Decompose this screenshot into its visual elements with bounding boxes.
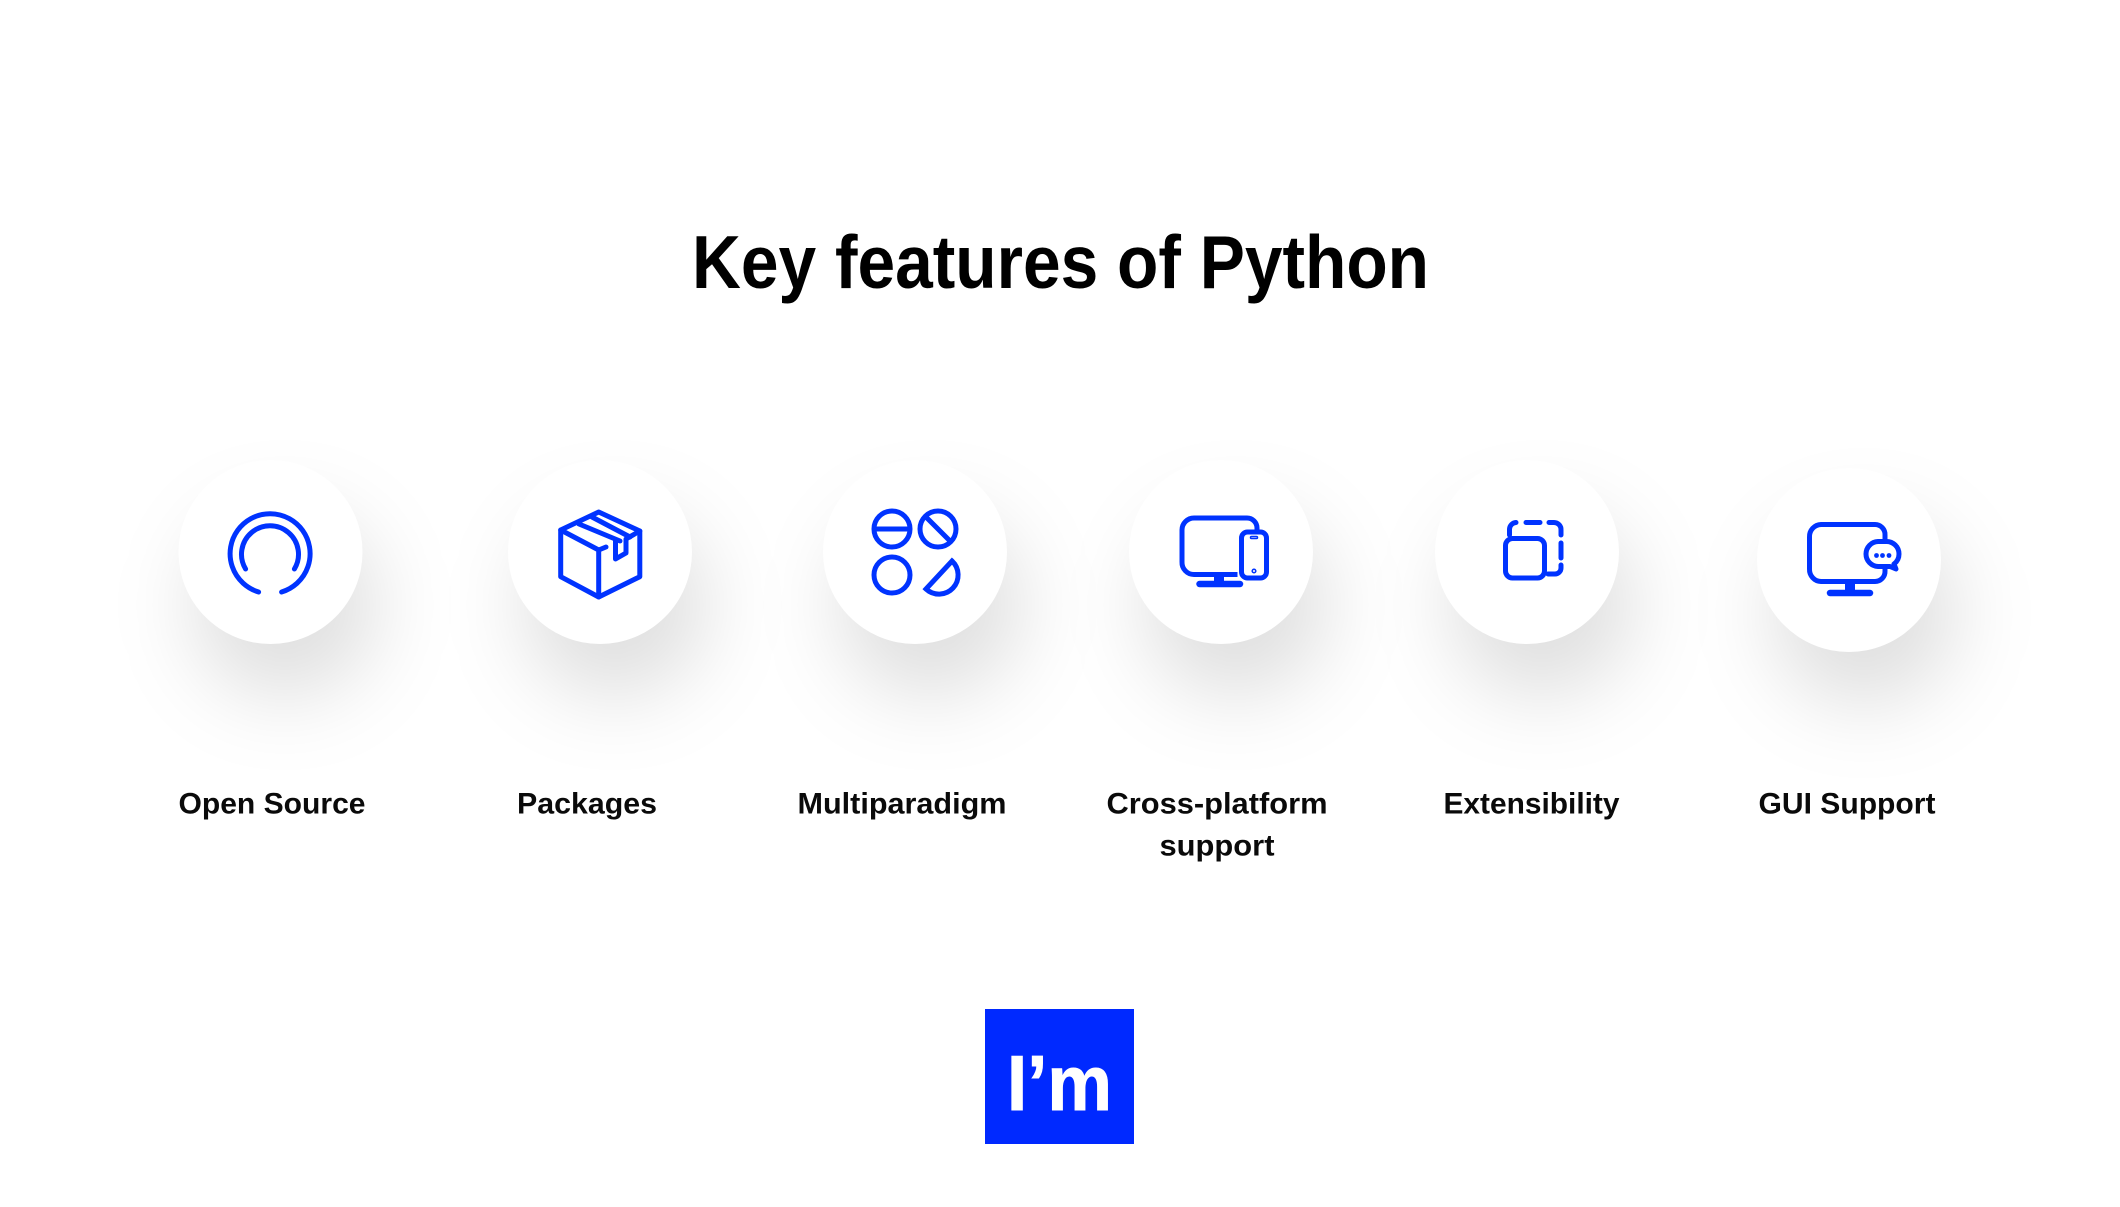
label: Packages: Packages — [517, 788, 657, 820]
icon: package box — [561, 512, 640, 597]
label: Multiparadigm: Multiparadigm — [798, 788, 1006, 820]
icon: monitor and phone — [1182, 518, 1266, 584]
icon: four circles — [874, 511, 958, 594]
label: Cross-platform support — [1106, 788, 1328, 862]
icon: dashed and solid squares — [1506, 522, 1561, 578]
panel: Open Source — [178, 460, 377, 820]
icon: monitor with chat bubble — [1809, 524, 1899, 593]
icon: chat dots — [1874, 553, 1891, 558]
label: Cross-platform support: support — [1160, 830, 1275, 862]
label: Cross-platform support: Cross-platform — [1106, 788, 1328, 820]
icon: open source rings — [230, 514, 310, 592]
label: GUI Support: GUI Support — [1758, 788, 1936, 820]
panel: Packages — [508, 460, 707, 820]
title: Key features of Python — [692, 220, 1429, 304]
logo: I’m — [1007, 1041, 1112, 1127]
panel: Cross-platform support — [1106, 460, 1328, 862]
panel: GUI Support — [1757, 468, 1956, 820]
panel: Extensibility — [1435, 460, 1634, 820]
label: Open Source: Open Source — [178, 788, 366, 820]
label: Extensibility: Extensibility — [1444, 788, 1620, 820]
logo — [985, 1009, 1134, 1144]
panel: Multiparadigm — [798, 460, 1022, 820]
